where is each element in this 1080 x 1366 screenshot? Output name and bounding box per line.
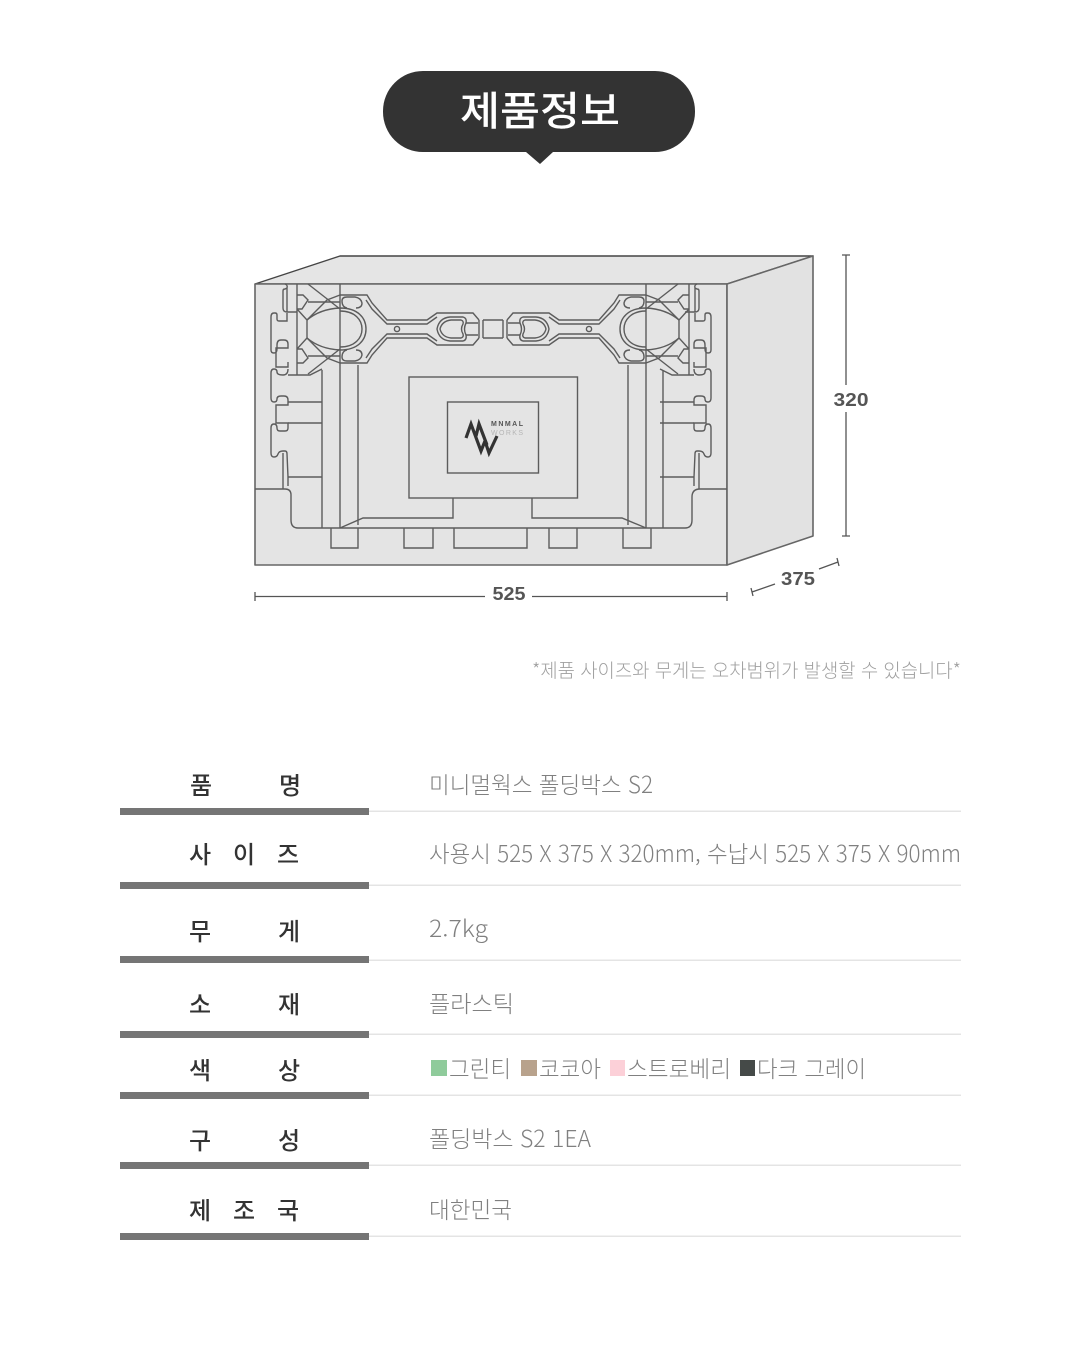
row: colors: 상 xyxy=(278,1051,300,1086)
dimension: depth 375: 375 xyxy=(781,568,815,589)
row: country of manufacture: 대한민국 xyxy=(429,1191,512,1225)
row: size: 즈 xyxy=(277,835,299,870)
puzzle edges left and right xyxy=(271,284,711,489)
row: colors: 스트로베리 xyxy=(627,1050,731,1084)
row: material: 플라스틱 xyxy=(429,985,514,1019)
row: product name xyxy=(120,766,961,815)
row: weight: 2.7kg xyxy=(429,910,489,944)
size disclaimer note: *제품 사이즈와 무게는 오차범위가 발생할 수 있습니다* xyxy=(532,656,961,683)
row: size: 사 xyxy=(189,835,211,870)
label panel xyxy=(409,377,578,498)
row: weight: 게 xyxy=(278,912,300,947)
title badge: 제품정보 xyxy=(460,79,620,137)
title badge xyxy=(383,71,695,164)
row: country of manufacture: 조 xyxy=(233,1191,255,1226)
dimension: height 320: 320 xyxy=(834,389,868,410)
row: contents: 폴딩박스 S2 1EA xyxy=(429,1120,591,1154)
row: product name: 품 xyxy=(190,766,212,801)
color swatches xyxy=(431,1060,447,1076)
foam insert outline xyxy=(255,284,727,548)
row: weight xyxy=(120,910,961,963)
row: product name: 미니멀웍스 폴딩박스 S2 xyxy=(429,766,653,800)
row: country of manufacture: 제 xyxy=(189,1191,211,1226)
logo mark xyxy=(466,424,497,453)
row: product name: 명 xyxy=(279,766,301,801)
row: colors: 다크 그레이 xyxy=(757,1050,866,1084)
row: country of manufacture: 국 xyxy=(277,1191,299,1226)
row: colors: 코코아 xyxy=(539,1050,601,1084)
logo plate xyxy=(448,402,538,473)
row: material xyxy=(120,985,961,1038)
row: weight: 무 xyxy=(189,912,211,947)
folding hinge chain xyxy=(297,284,689,374)
row: material: 재 xyxy=(278,985,300,1020)
row: size xyxy=(120,835,961,889)
box faces xyxy=(255,256,813,565)
logo plate: WORKS xyxy=(491,430,523,437)
dimension: depth 375 xyxy=(751,558,839,596)
dimension: width 525: 525 xyxy=(492,583,526,604)
row: colors: 그린티 xyxy=(449,1050,511,1084)
row: contents: 성 xyxy=(278,1121,300,1156)
row: colors xyxy=(120,1050,961,1099)
product box dimension drawing xyxy=(255,256,813,565)
row: country of manufacture xyxy=(120,1191,961,1240)
row: colors: 색 xyxy=(189,1051,211,1086)
row: size: 이 xyxy=(233,835,255,870)
dimension: height 320 xyxy=(834,255,868,536)
row: contents xyxy=(120,1120,961,1169)
dimension: width 525 xyxy=(255,583,727,604)
spec table xyxy=(120,766,961,1240)
row: contents: 구 xyxy=(189,1121,211,1156)
logo wordmark: MNMAL xyxy=(491,421,524,428)
row: material: 소 xyxy=(189,985,211,1020)
row: size: 사용시 525 X 375 X 320mm, 수납시 525 X 375 X 90mm xyxy=(429,835,961,869)
